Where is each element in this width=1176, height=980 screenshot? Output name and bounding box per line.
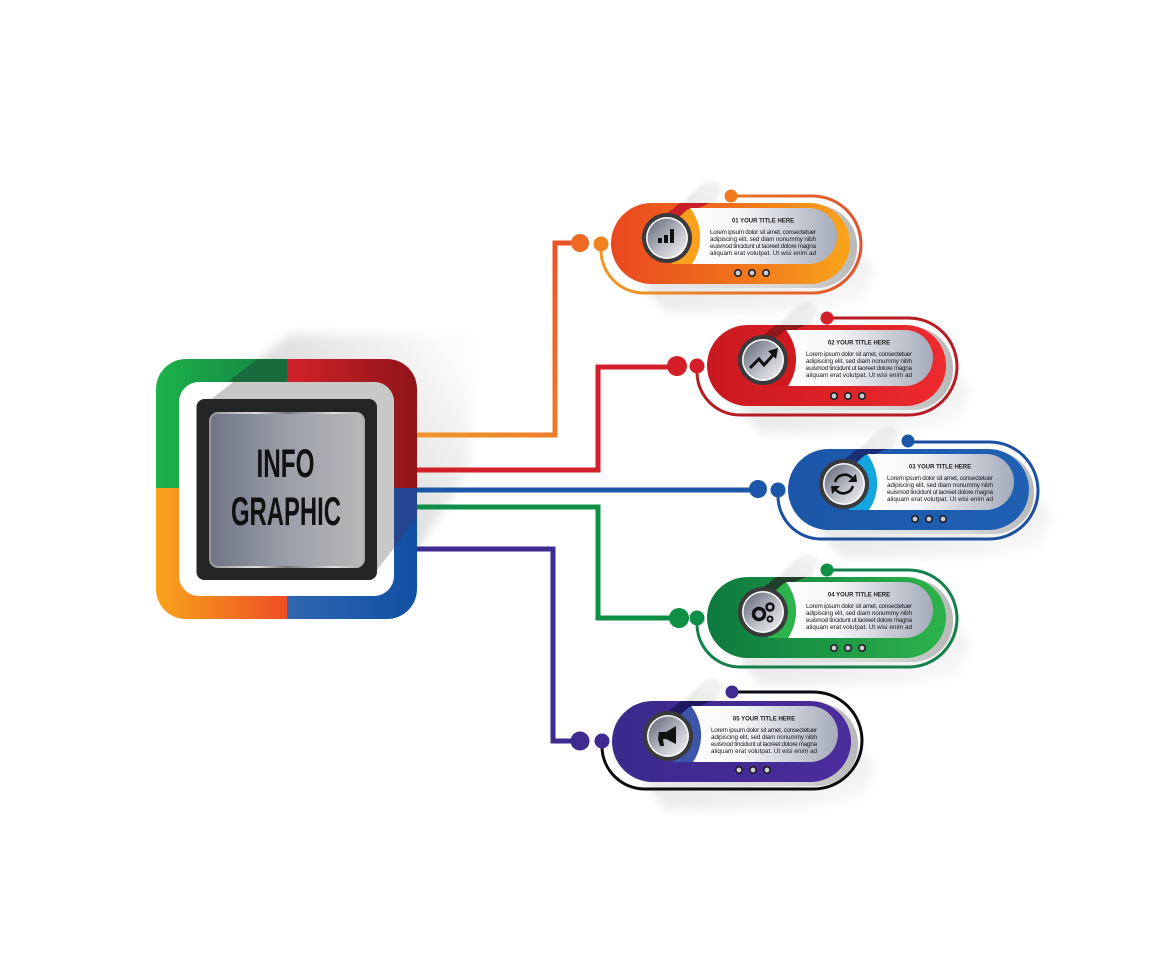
body text [806,603,912,631]
connector: purple line to card 5 [417,549,580,741]
title: 01 YOUR TITLE HERE [732,218,794,224]
body text: adipiscing elit, sed diam nonummy nibh [887,482,993,489]
connector: red line to card 2 [417,367,677,470]
three dots [912,516,946,522]
connector dots [667,312,834,376]
heading: GRAPHIC: GRAPHIC [231,490,341,534]
body text: adipiscing elit, sed diam nonummy nibh [806,358,912,365]
card 5: purple [570,678,876,810]
connector: orange line to card 1 [417,243,580,435]
card 2: red [667,302,971,434]
connector dots [571,190,738,252]
heading: INFO: INFO [256,442,314,486]
body text: adipiscing elit, sed diam nonummy nibh [806,610,912,617]
outer line [697,318,957,415]
card 3: blue [749,426,1052,558]
text panel [786,330,933,386]
body text: Lorem ipsum dolor sit amet, consectetuer [710,229,816,236]
body text: Lorem ipsum dolor sit amet, consectetuer [711,727,817,734]
body text [711,727,817,755]
outer line [697,570,957,667]
body text: euismod tincidunt ut laoreet dolore magna [711,741,817,748]
text panel [786,582,933,638]
overlay shadow [761,577,806,592]
body text [806,351,912,379]
body text: euismod tincidunt ut laoreet dolore magna [887,489,993,496]
silver panel [210,413,364,567]
connector dots [749,434,914,498]
title: 04 YOUR TITLE HERE [828,592,890,598]
text panel [690,208,837,264]
connector dots [669,564,834,628]
three dots [735,270,769,276]
icon disc: refresh arrows [819,459,869,509]
icon disc: bar chart [642,213,692,263]
connector: green line to card 4 [417,507,678,618]
connector dots [570,686,738,750]
icon disc: megaphone [643,711,693,761]
three dots [831,645,865,651]
card 4: green [669,554,971,686]
body text: euismod tincidunt ut laoreet dolore magna [806,365,912,372]
body text: Lorem ipsum dolor sit amet, consectetuer [806,603,912,610]
body text: adipiscing elit, sed diam nonummy nibh [710,236,816,243]
body text: adipiscing elit, sed diam nonummy nibh [711,734,817,741]
icon disc: gears [738,587,788,637]
connector: blue line to card 3 [417,488,758,492]
overlay shadow [761,325,806,340]
dark frame [196,399,377,580]
body text: aliquam erat volutpat. Ut wisi enim ad [710,250,816,257]
central block shadow [210,334,470,560]
overlay shadow [665,203,710,218]
body text: Lorem ipsum dolor sit amet, consectetuer [806,351,912,358]
card 1: orange [571,180,875,312]
text panel [867,454,1014,510]
outer line [601,196,861,293]
body text: aliquam erat volutpat. Ut wisi enim ad [806,372,912,379]
outer line [778,442,1038,539]
three dots [736,767,770,773]
title: 03 YOUR TITLE HERE [909,464,971,470]
long shadow [205,382,394,579]
title: 02 YOUR TITLE HERE [828,340,890,346]
body text: Lorem ipsum dolor sit amet, consectetuer [887,475,993,482]
body text: euismod tincidunt ut laoreet dolore magna [806,617,912,624]
three dots [831,393,865,399]
ring: four coloured quadrants [156,359,417,619]
outer line [602,692,862,789]
body text: aliquam erat volutpat. Ut wisi enim ad [887,496,993,503]
overlay shadow [666,701,711,716]
body text [887,475,993,503]
title: 05 YOUR TITLE HERE [733,716,795,722]
overlay shadow [842,449,887,464]
body text: euismod tincidunt ut laoreet dolore magna [710,243,816,250]
text panel [691,706,838,762]
body text: aliquam erat volutpat. Ut wisi enim ad [711,748,817,755]
body text [710,229,816,257]
body text: aliquam erat volutpat. Ut wisi enim ad [806,624,912,631]
icon disc: trend arrow [738,335,788,385]
central block: info graphic square [156,359,417,619]
